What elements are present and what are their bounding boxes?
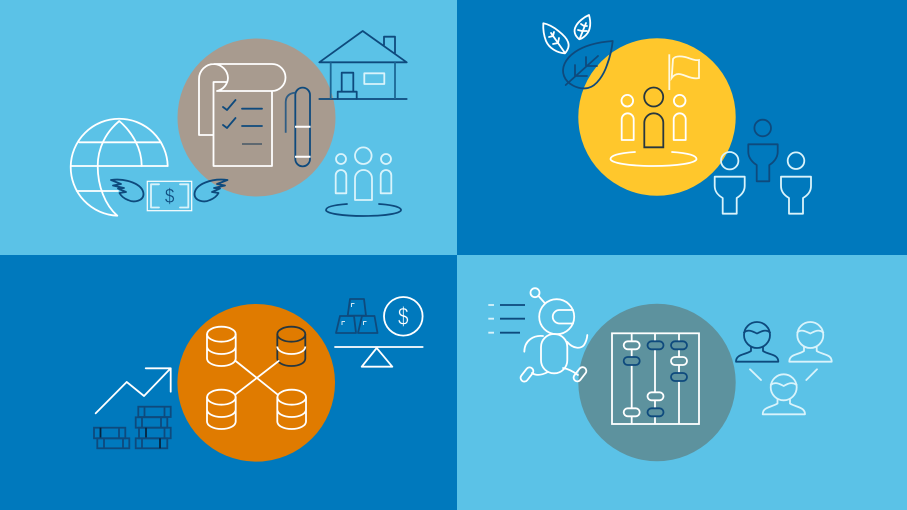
connection ticks bbox=[750, 369, 817, 380]
icon: database top right bbox=[277, 327, 305, 366]
icon: scroll checklist bbox=[199, 64, 286, 166]
icon: flying banknote bbox=[111, 180, 228, 211]
orange circle bbox=[177, 304, 335, 462]
yellow circle bbox=[578, 38, 736, 196]
banknote: $ bbox=[165, 186, 174, 208]
right wing bbox=[194, 180, 228, 201]
icon: house bbox=[319, 31, 407, 99]
icon: light person right bbox=[789, 322, 832, 362]
panel: compliance and paperwork bbox=[0, 0, 457, 255]
icon: light person bottom bbox=[763, 374, 805, 414]
icon: running robot bbox=[519, 288, 588, 383]
icon: coin stacks bbox=[94, 407, 171, 448]
panel: data and finance bbox=[0, 255, 457, 510]
speed lines bbox=[488, 305, 525, 333]
icon: rising arrow bbox=[96, 368, 171, 413]
icon: dollar coin: $ bbox=[398, 303, 409, 331]
icon: balance scale bbox=[335, 347, 423, 367]
icon: white leaf large bbox=[543, 23, 569, 53]
icon: database top left bbox=[207, 327, 236, 366]
icon: team on platform bbox=[610, 88, 696, 166]
icon: pen bbox=[286, 88, 310, 166]
icon: gold bars bbox=[336, 299, 378, 333]
network connectors bbox=[236, 361, 279, 394]
icon: abacus bbox=[612, 333, 699, 424]
slate circle bbox=[578, 304, 736, 461]
taupe circle bbox=[178, 38, 336, 196]
icon: middle podium person bbox=[748, 120, 778, 181]
icon: white leaf small bbox=[575, 15, 590, 39]
icon: dark person bbox=[736, 322, 778, 362]
icon: left podium person bbox=[715, 152, 745, 214]
icon: group of people bbox=[326, 147, 401, 216]
icon: right podium person bbox=[781, 152, 811, 214]
icon: dark leaf bbox=[563, 41, 613, 88]
icon: database bottom right bbox=[277, 390, 306, 429]
icon: flag bbox=[669, 54, 699, 90]
icon: dollar coin bbox=[384, 297, 423, 336]
left wing bbox=[111, 180, 144, 201]
panel: community and sustainability bbox=[457, 0, 907, 255]
icon: database bottom left bbox=[207, 390, 236, 429]
icon: globe bbox=[71, 119, 168, 216]
panel: automation and people bbox=[457, 255, 907, 510]
